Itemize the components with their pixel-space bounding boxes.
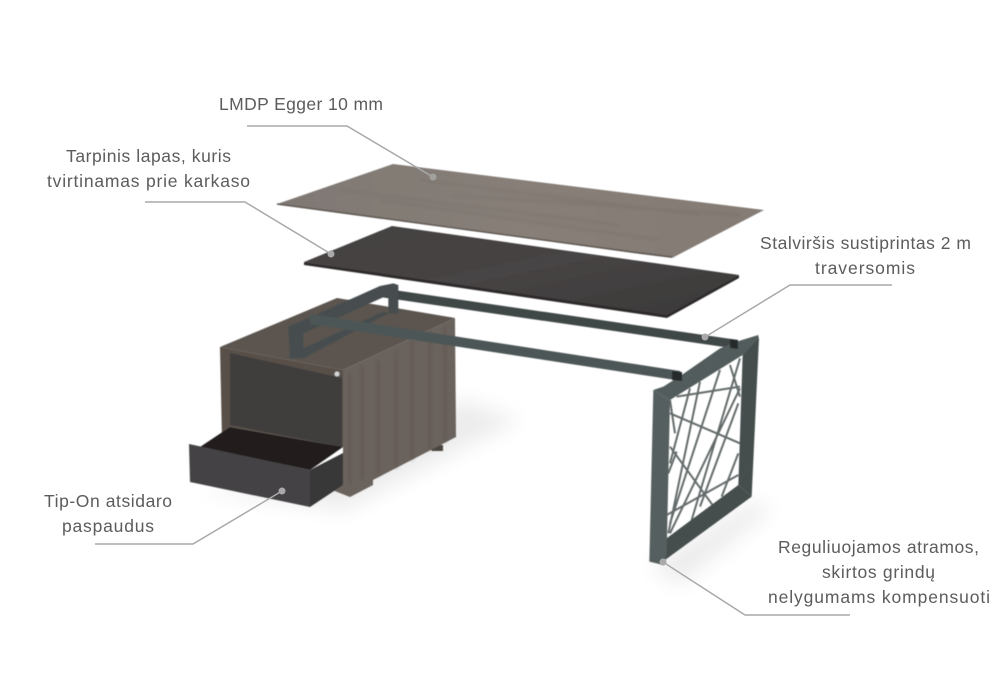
rear traverse [380,288,738,349]
label: Tip-On: paspaudus [62,516,154,536]
leader dot: LMDP [430,174,436,180]
leader dot: Reguliuojamos [660,558,666,566]
leader dot: Stalviršis [702,334,708,340]
cabinet top [220,298,455,370]
cabinet front frame [220,347,343,447]
leader line: Stalviršis [705,285,892,337]
cabinet foot back [427,445,443,451]
metal frame [288,283,759,565]
leg diagonals [667,358,740,533]
table top panel: LMDP Egger [277,164,764,258]
label: LMDP Egger: LMDP Egger 10 mm [219,94,383,114]
leg bottom bar [665,485,752,560]
traverse end caps [672,339,738,381]
label: Tip-On: Tip-On atsidaro [44,491,172,511]
drawer right side [310,453,343,507]
cabinet [189,298,456,507]
label: Stalviršis: Stalviršis sustiprintas 2 m [760,233,971,253]
label: Reguliuojamos atramos: skirtos grindų [822,562,935,582]
label: Reguliuojamos atramos [768,537,990,607]
intermediate dark panel [304,226,739,318]
leg front post [649,390,670,565]
leg top bar [653,335,759,400]
leader dot: Tip-On [278,488,286,494]
label: Tarpinis lapas: Tarpinis lapas, kuris [66,146,231,166]
leader dot: Tarpinis [328,250,334,258]
drawer front [189,444,310,507]
label: Tip-On [44,491,172,536]
leader line: Tarpinis [145,202,331,254]
label: Reguliuojamos atramos: Reguliuojamos atramos, [778,537,979,557]
label: Reguliuojamos atramos: nelygumams kompensuoti [768,587,990,607]
front traverse [310,314,682,381]
cabinet front dark panel [230,353,342,447]
label: Tarpinis lapas [47,146,250,191]
cabinet side [327,318,456,497]
label: Stalviršis [760,233,971,278]
drawer interior [200,427,343,470]
left bracket [288,283,398,358]
cabinet screw dot [334,372,340,376]
leader line: Tip-On [95,491,282,544]
leg right post [738,338,759,497]
leg frame [649,335,759,565]
floor shadow [200,400,770,585]
leader line: Reguliuojamos [663,562,850,615]
leader line: LMDP [247,126,433,177]
label: Tarpinis lapas: tvirtinamas prie karkaso [47,171,250,191]
label: Stalviršis: traversomis [815,258,915,278]
